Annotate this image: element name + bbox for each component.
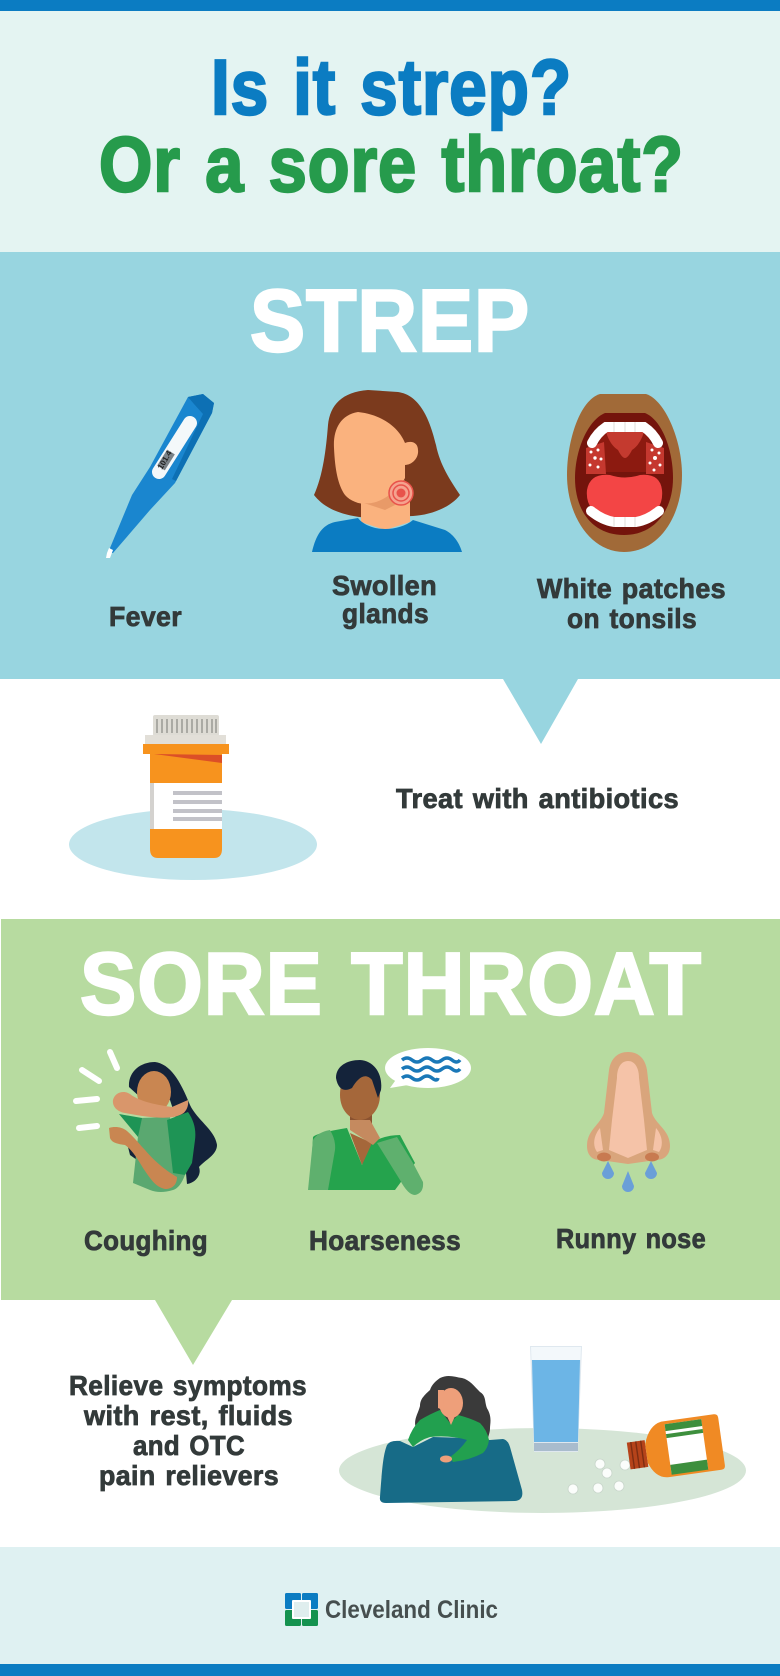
title line 1: Is it strep? (211, 43, 572, 131)
speech bubble (385, 1048, 471, 1088)
panel: strep (0, 252, 780, 744)
label: swollen glands: Swollen (332, 570, 437, 601)
panel: sore throat (1, 919, 780, 1365)
text: relieve symptoms: pain relievers (99, 1460, 279, 1491)
icon: swollen glands (312, 390, 462, 552)
label: white patches on tonsils: White patches (537, 573, 726, 604)
bottom bar (0, 1664, 780, 1676)
label: hoarseness: Hoarseness (309, 1225, 461, 1256)
label: coughing: Coughing (84, 1225, 208, 1256)
text: treat with antibiotics: Treat with antibiotics (396, 783, 679, 814)
label: white patches on tonsils: on tonsils (567, 603, 697, 634)
text: relieve symptoms: Relieve symptoms (69, 1370, 307, 1401)
panel: strep treatment (69, 715, 679, 880)
label: fever: Fever (109, 601, 182, 632)
swollen gland rings (389, 481, 413, 505)
icon: pill bottle (69, 715, 317, 880)
panel: footer (0, 1547, 780, 1664)
label: swollen glands (332, 570, 437, 629)
icon: open mouth with tonsils (567, 394, 682, 552)
title line 2: Or a sore throat? (99, 120, 684, 208)
icon: glass of water (530, 1346, 582, 1452)
icon: coughing person (76, 1052, 217, 1192)
icon: pills (568, 1459, 630, 1494)
wordmark: Cleveland Clinic (325, 1596, 498, 1624)
heading: strep: STREP (250, 271, 530, 370)
top bar (0, 0, 780, 11)
text: relieve symptoms (69, 1370, 307, 1491)
logo: Cleveland Clinic (285, 1593, 318, 1626)
panel: sore throat treatment (69, 1346, 746, 1513)
label: runny nose: Runny nose (556, 1223, 706, 1254)
label: white patches on tonsils (537, 573, 726, 634)
heading: sore throat: SORE THROAT (80, 934, 702, 1033)
icon: thermometer (106, 394, 214, 558)
icon: thermometer: 101.4 (156, 449, 174, 471)
illustration: rest, fluids, pills (339, 1346, 746, 1513)
icon: runny nose (587, 1052, 670, 1192)
icon: woman under blanket (380, 1376, 522, 1503)
text: relieve symptoms: and OTC (133, 1430, 245, 1461)
icon: spilled bottle (625, 1414, 725, 1482)
panel: title header (0, 11, 780, 252)
icon: hoarse person with speech bubble (308, 1048, 471, 1195)
label: swollen glands: glands (342, 598, 429, 629)
text: relieve symptoms: with rest, fluids (83, 1400, 293, 1431)
